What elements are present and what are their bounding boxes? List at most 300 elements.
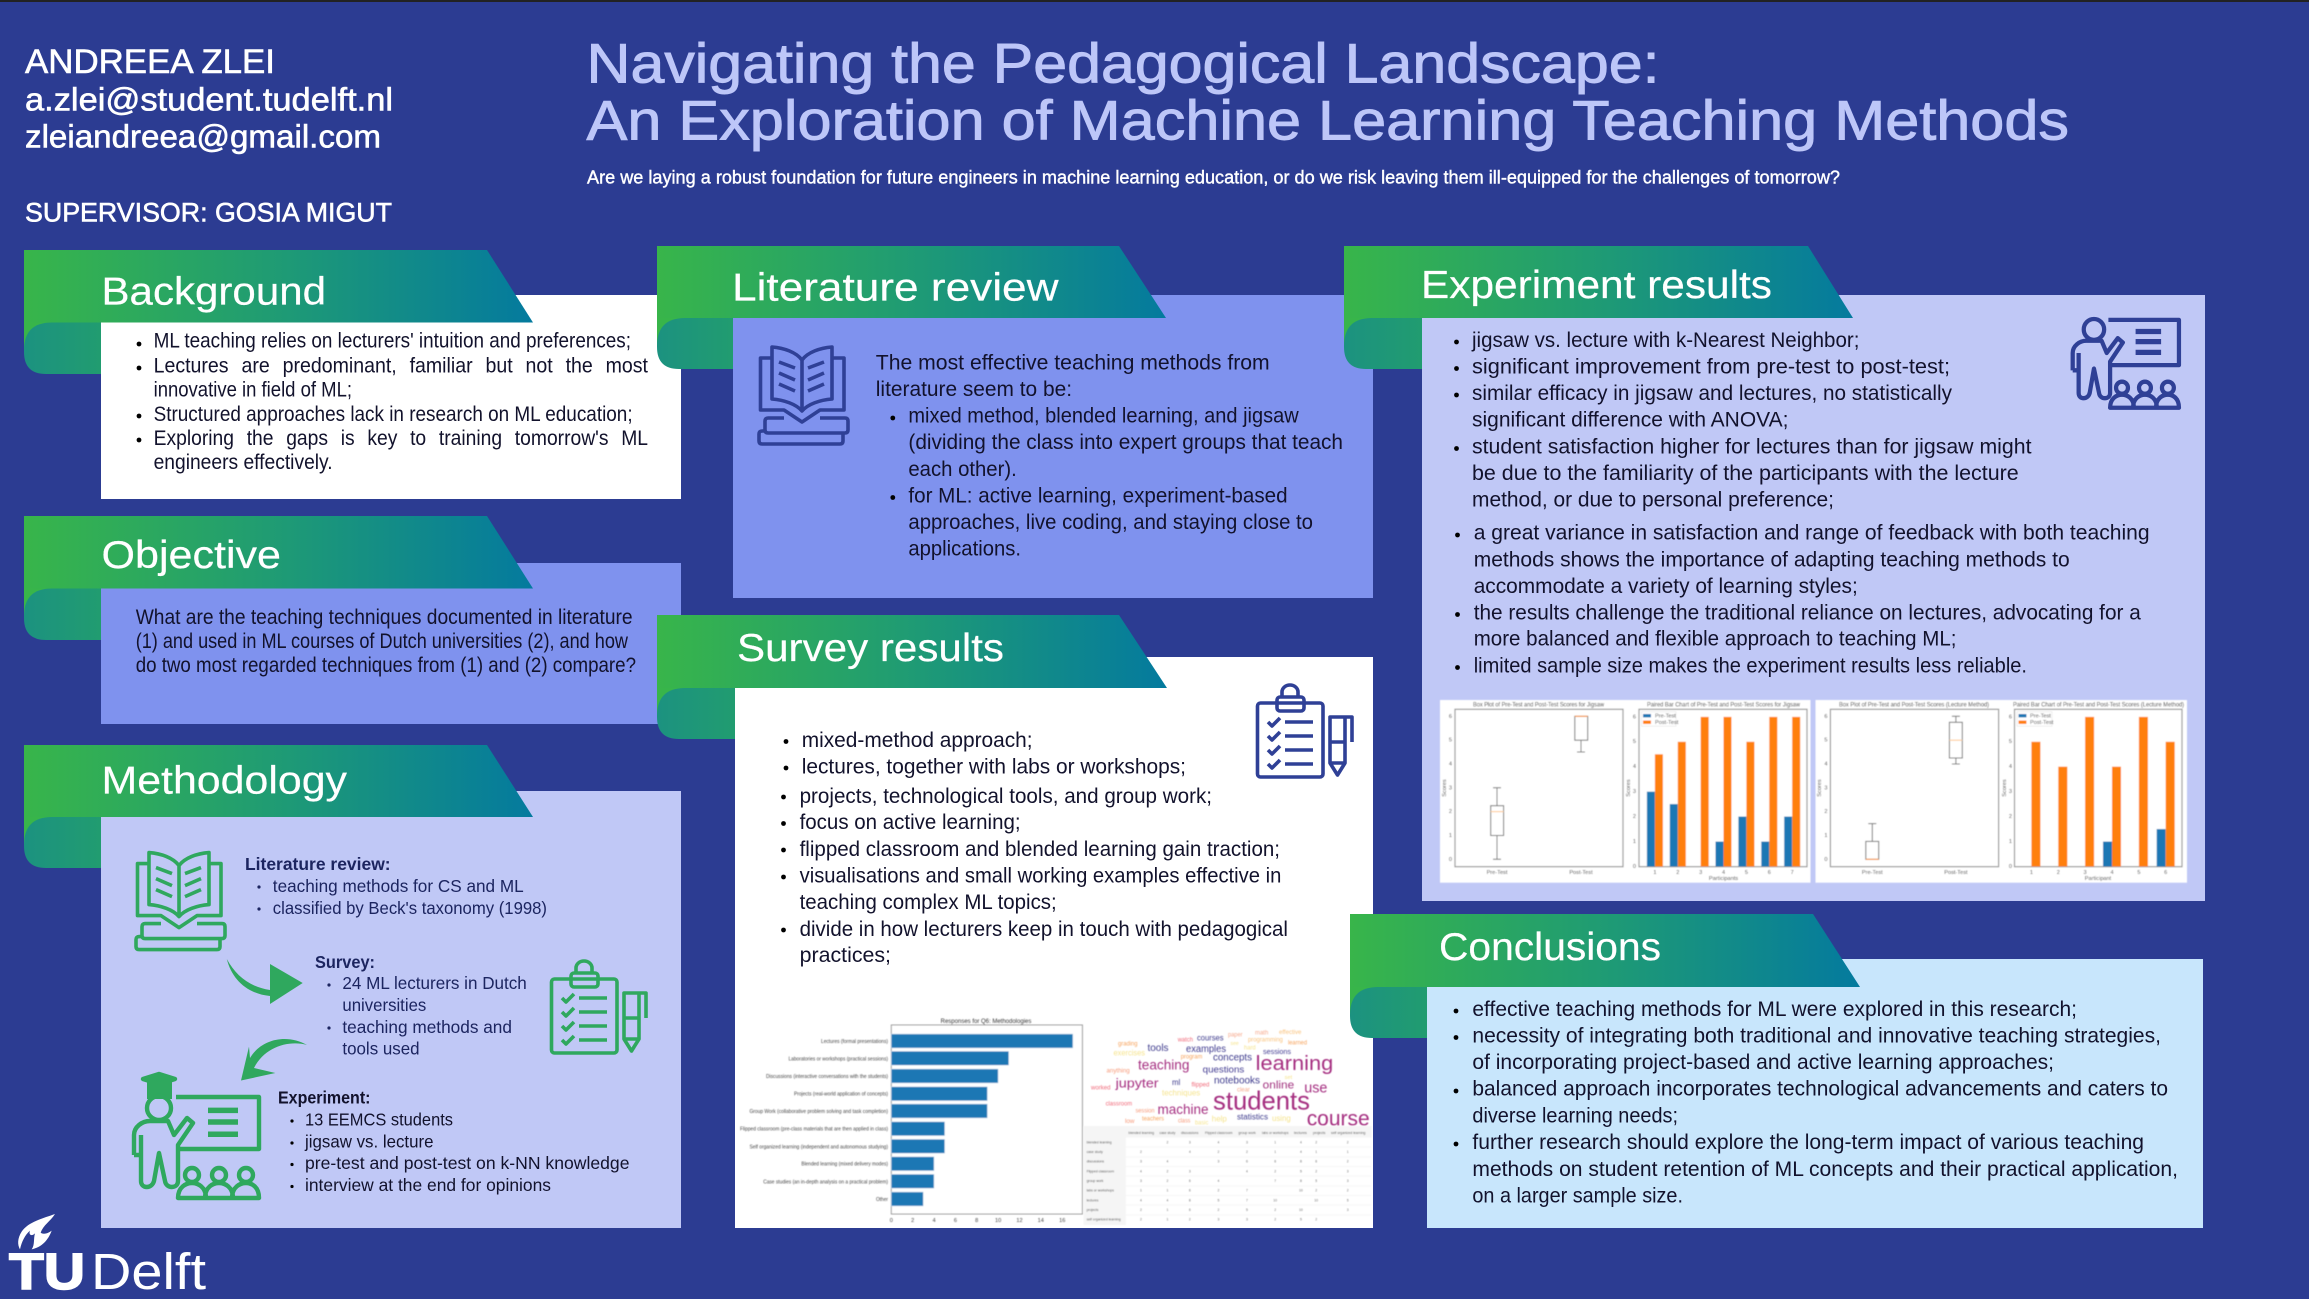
text: literature findings: The most effective teaching methods from: [876, 351, 1270, 374]
table: co-occurrence matrix: 6: [1274, 1160, 1276, 1164]
charts: jigsaw box plot and paired bars: 6: [1768, 870, 1771, 876]
heading: conclusions: Conclusions: [1439, 926, 1661, 969]
table: co-occurrence matrix: 10: [1314, 1198, 1318, 1202]
word cloud: statistics: [1237, 1112, 1268, 1121]
table: co-occurrence matrix: self organized learning: [1087, 1218, 1121, 1222]
bullet list: conclusions: on a larger sample size.: [1472, 1185, 1683, 1208]
table: co-occurrence matrix: 3: [1140, 1160, 1142, 1164]
table: co-occurrence matrix: projects: [1087, 1208, 1099, 1212]
word cloud: exercises: [1114, 1048, 1145, 1057]
charts: lecture box plot and paired bars: 1: [2009, 839, 2012, 845]
heading: objective: Objective: [102, 534, 281, 577]
table: co-occurrence matrix: 2: [1315, 1189, 1317, 1193]
charts: jigsaw box plot and paired bars: 6: [1449, 714, 1452, 720]
charts: lecture box plot and paired bars: 5: [1824, 738, 1828, 744]
literature review step: [245, 854, 547, 918]
charts: jigsaw box plot and paired bars: 1: [1653, 870, 1656, 876]
table: co-occurrence matrix: 6: [1189, 1208, 1191, 1212]
charts: jigsaw box plot and paired bars: Scores: [1626, 779, 1632, 797]
table: co-occurrence matrix: 4: [1217, 1179, 1219, 1183]
literature review step: Literature review:: [245, 854, 391, 874]
bullet list: experiment results: jigsaw vs. lecture with k-Nearest Neighbor;: [1471, 329, 1859, 352]
table: co-occurrence matrix: 2: [1217, 1150, 1219, 1154]
bar chart: responses for Q6 methodologies: [740, 1019, 1082, 1224]
word cloud: teachers: [1142, 1117, 1164, 1123]
bullet list: background: [137, 330, 648, 474]
charts: jigsaw box plot and paired bars: 5: [1745, 870, 1748, 876]
charts: jigsaw box plot and paired bars: Post-Test: [1655, 720, 1679, 726]
bullet list: experiment results: similar efficacy in jigsaw and lectures, no statistically: [1472, 382, 1952, 405]
table: co-occurrence matrix: 3: [1246, 1218, 1248, 1222]
table: co-occurrence matrix: 1: [1315, 1150, 1317, 1154]
table: co-occurrence matrix: 1: [1140, 1189, 1142, 1193]
charts: jigsaw box plot and paired bars: 2: [1449, 809, 1452, 815]
bullet list: survey results: flipped classroom and blended learning gain traction;: [800, 838, 1280, 861]
table: co-occurrence matrix: 2: [1315, 1218, 1317, 1222]
table: co-occurrence matrix: 2: [1140, 1150, 1142, 1154]
bar chart: responses for Q6 methodologies: 12: [1016, 1218, 1023, 1224]
table: co-occurrence matrix: group work: [1238, 1131, 1256, 1135]
table: co-occurrence matrix: 2: [1315, 1169, 1317, 1173]
table: co-occurrence matrix: 10: [1273, 1198, 1277, 1202]
word cloud: courses: [1197, 1034, 1224, 1043]
table: co-occurrence matrix: 2: [1140, 1218, 1142, 1222]
word cloud: ml: [1172, 1078, 1181, 1087]
bullet list: experiment results: significant difference with ANOVA;: [1472, 409, 1788, 432]
panel: objective: [24, 516, 681, 724]
table: co-occurrence matrix: 6: [1246, 1160, 1248, 1164]
table: co-occurrence matrix: 7: [1274, 1179, 1276, 1183]
word cloud: questions: [1203, 1065, 1244, 1076]
table: co-occurrence matrix: 8: [1189, 1198, 1191, 1202]
table: co-occurrence matrix: 2: [1274, 1208, 1276, 1212]
text: literature findings: applications.: [908, 537, 1021, 560]
table: co-occurrence matrix: 8: [1300, 1179, 1302, 1183]
bar chart: responses for Q6 methodologies: Self organized learning (independent and autonomous studying): [750, 1144, 888, 1150]
table: co-occurrence matrix: 7: [1246, 1189, 1248, 1193]
experiment step: [278, 1088, 630, 1195]
icon: teacher with graduation cap: [134, 1074, 259, 1198]
word cloud: examples: [1186, 1044, 1226, 1055]
heading: experiment results: Experiment results: [1421, 264, 1772, 307]
word cloud: sessions: [1263, 1047, 1291, 1056]
charts: lecture box plot and paired bars: 0: [2009, 864, 2012, 870]
charts: lecture box plot and paired bars: 6: [2164, 870, 2167, 876]
word cloud: watch: [1177, 1038, 1193, 1044]
word cloud: program: [1181, 1054, 1202, 1061]
charts: lecture box plot and paired bars: [1816, 700, 2187, 883]
charts: lecture box plot and paired bars: 6: [1824, 714, 1828, 720]
charts: jigsaw box plot and paired bars: 4: [1633, 764, 1636, 770]
word cloud: effective: [1279, 1030, 1302, 1036]
author block: ANDREEA ZLEI: [25, 43, 275, 81]
heading: background: Background: [102, 270, 326, 314]
charts: jigsaw box plot and paired bars: 6: [1633, 714, 1636, 720]
word cloud: learning: [1256, 1052, 1333, 1075]
bar chart: responses for Q6 methodologies: Group Work (collaborative problem solving and task completion): [750, 1109, 888, 1115]
charts: jigsaw box plot and paired bars: 7: [1791, 870, 1794, 876]
icon: clipboard: [1258, 685, 1352, 777]
table: co-occurrence matrix: 2: [1217, 1189, 1219, 1193]
panel: literature review: [657, 246, 1373, 598]
table: co-occurrence matrix: 3: [1140, 1179, 1142, 1183]
table: co-occurrence matrix: 5: [1300, 1218, 1302, 1222]
charts: jigsaw box plot and paired bars: Pre-Test: [1655, 714, 1676, 720]
table: co-occurrence matrix: 8: [1300, 1160, 1302, 1164]
experiment step: jigsaw vs. lecture: [304, 1132, 434, 1152]
table: co-occurrence matrix: case study: [1159, 1131, 1176, 1135]
bar chart: responses for Q6 methodologies: Case studies (an in-depth analysis on a practical problem): [763, 1179, 888, 1185]
bullet list: experiment results: a great variance in satisfaction and range of feedback with both teaching: [1474, 522, 2150, 545]
charts: lecture box plot and paired bars: 1: [1824, 833, 1828, 839]
table: co-occurrence matrix: 2: [1166, 1179, 1168, 1183]
charts: lecture box plot and paired bars: 2: [1824, 809, 1828, 815]
table: co-occurrence matrix: 5: [1300, 1169, 1302, 1173]
charts: lecture box plot and paired bars: 3: [1824, 786, 1828, 792]
charts: jigsaw box plot and paired bars: Box Plot of Pre-Test and Post-Test Scores for Jigsaw: [1473, 703, 1605, 709]
arrow: survey to experiment: [241, 1039, 307, 1080]
bar chart: responses for Q6 methodologies: 8: [975, 1218, 978, 1224]
bullet list: conclusions: of incorporating project-based and active learning approaches;: [1472, 1051, 2054, 1074]
bullet list: experiment results: limited sample size makes the experiment results less reliable.: [1474, 654, 2027, 677]
icon: book: [759, 347, 848, 444]
charts: jigsaw box plot and paired bars: Paired Bar Chart of Pre-Test and Post-Test Scores for Jigsaw: [1647, 703, 1801, 709]
bullet list: experiment results: the results challenge the traditional reliance on lectures, advocating for a: [1474, 601, 2141, 624]
bar chart: responses for Q6 methodologies: Projects (real-world application of concepts): [794, 1092, 888, 1098]
charts: jigsaw box plot and paired bars: 2: [1676, 870, 1679, 876]
word cloud: flipped: [1192, 1082, 1210, 1089]
word cloud: online: [1263, 1080, 1294, 1092]
word cloud: paper: [1228, 1032, 1242, 1038]
bullet list: background: Exploring the gaps is key to training tomorrow's ML: [154, 427, 648, 450]
survey step: 24 ML lecturers in Dutch: [342, 973, 527, 993]
table: co-occurrence matrix: 6: [1189, 1189, 1191, 1193]
table: co-occurrence matrix: case study: [1087, 1150, 1103, 1154]
table: co-occurrence matrix: 1: [1274, 1150, 1276, 1154]
arrow: literature to survey: [227, 959, 303, 1004]
charts: lecture box plot and paired bars: 4: [1824, 762, 1828, 768]
panel: experiment results: [1344, 246, 2205, 901]
bullet list: conclusions: methods on student retention of ML concepts and their practical application,: [1472, 1158, 2178, 1181]
text: literature findings: [876, 351, 1343, 560]
word cloud: use: [1304, 1081, 1327, 1097]
table: co-occurrence matrix: 2: [1217, 1208, 1219, 1212]
logo: TU Delft: TU: [9, 1243, 85, 1299]
word cloud: notebooks: [1214, 1075, 1260, 1086]
bullet list: experiment results: more balanced and flexible approach to teaching ML;: [1474, 628, 1956, 651]
charts: jigsaw box plot and paired bars: 3: [1449, 786, 1452, 792]
survey step: [315, 952, 527, 1058]
bullet list: experiment results: be due to the familiarity of the participants with the lecture: [1472, 462, 2019, 485]
table: co-occurrence matrix: 4: [1300, 1150, 1302, 1154]
word cloud: machine: [1158, 1101, 1209, 1117]
table: co-occurrence matrix: 3: [1189, 1140, 1191, 1144]
table: co-occurrence matrix: 3: [1347, 1208, 1349, 1212]
word cloud: course: [1307, 1108, 1370, 1130]
bar chart: responses for Q6 methodologies: Other: [876, 1197, 888, 1203]
word cloud: anything: [1106, 1068, 1130, 1075]
bullet list: background: innovative in field of ML;: [154, 379, 352, 402]
survey step: Survey:: [315, 952, 375, 972]
panel: survey results: [657, 615, 1373, 1228]
table: co-occurrence matrix: 1: [1166, 1218, 1168, 1222]
table: co-occurrence matrix: 2: [1274, 1169, 1276, 1173]
word cloud: students: [1213, 1088, 1310, 1116]
charts: jigsaw box plot and paired bars: Scores: [1442, 779, 1448, 797]
word cloud: using: [1272, 1114, 1291, 1123]
table: co-occurrence matrix: 2: [1189, 1218, 1191, 1222]
charts: lecture box plot and paired bars: 4: [2009, 764, 2012, 770]
bullet list: survey results: divide in how lecturers keep in touch with pedagogical: [800, 918, 1288, 941]
author block: [25, 43, 393, 228]
panel: conclusions: [1350, 914, 2203, 1228]
title: Navigating the Pedagogical Landscape:: [586, 32, 1660, 95]
table: co-occurrence matrix: 4: [1140, 1198, 1142, 1202]
bullet list: conclusions: diverse learning needs;: [1472, 1105, 1678, 1128]
table: co-occurrence matrix: 10: [1299, 1208, 1303, 1212]
charts: lecture box plot and paired bars: 3: [2084, 870, 2087, 876]
bullet list: background: Structured approaches lack in research on ML education;: [154, 403, 633, 426]
table: co-occurrence matrix: 6: [1315, 1160, 1317, 1164]
bar chart: responses for Q6 methodologies: Laboratories or workshops (practical sessions): [788, 1056, 888, 1062]
charts: jigsaw box plot and paired bars: Participants: [1709, 876, 1738, 882]
charts: lecture box plot and paired bars: 5: [2137, 870, 2140, 876]
charts: jigsaw box plot and paired bars: Pre-Test: [1487, 870, 1508, 876]
bullet list: survey results: mixed-method approach;: [802, 729, 1033, 752]
charts: lecture box plot and paired bars: 0: [1824, 857, 1828, 863]
table: co-occurrence matrix: 2: [1166, 1169, 1168, 1173]
bullet list: survey results: practices;: [800, 944, 891, 967]
charts: lecture box plot and paired bars: 4: [2110, 870, 2114, 876]
word cloud: help: [1212, 1115, 1227, 1124]
word cloud: [1090, 1029, 1370, 1130]
charts: lecture box plot and paired bars: Participant: [2085, 876, 2112, 882]
table: co-occurrence matrix: 3: [1347, 1179, 1349, 1183]
bullet list: conclusions: balanced approach incorporates technological advancements and caters to: [1472, 1078, 2168, 1100]
text: literature findings: literature seem to be:: [876, 378, 1072, 401]
table: co-occurrence matrix: 4: [1166, 1198, 1168, 1202]
text: literature findings: mixed method, blended learning, and jigsaw: [908, 405, 1299, 428]
text: literature findings: for ML: active learning, experiment-based: [908, 484, 1288, 507]
survey step: tools used: [342, 1038, 420, 1058]
icon: teacher: [2073, 319, 2179, 408]
word cloud: basic: [1195, 1120, 1208, 1126]
word cloud: worked: [1090, 1085, 1111, 1092]
literature review step: teaching methods for CS and ML: [273, 876, 524, 896]
icon: book: [136, 853, 225, 950]
table: co-occurrence matrix: 2: [1166, 1140, 1168, 1144]
logo: TU Delft: [9, 1214, 206, 1299]
table: co-occurrence matrix: 3: [1246, 1140, 1248, 1144]
word cloud: set: [1285, 1075, 1293, 1081]
table: co-occurrence matrix: labs or workshops: [1087, 1189, 1114, 1193]
author block: SUPERVISOR: GOSIA MIGUT: [25, 198, 392, 228]
bullet list: survey results: visualisations and small working examples effective in: [800, 865, 1281, 888]
word cloud: teaching: [1138, 1057, 1189, 1072]
charts: lecture box plot and paired bars: 3: [2009, 789, 2012, 795]
table: co-occurrence matrix: self organized learning: [1331, 1131, 1366, 1135]
heading: literature review: Literature review: [732, 267, 1059, 310]
charts: lecture box plot and paired bars: 2: [2009, 814, 2012, 820]
word cloud: see: [1230, 1041, 1239, 1047]
table: co-occurrence matrix: 5: [1347, 1198, 1349, 1202]
charts: jigsaw box plot and paired bars: 1: [1633, 839, 1636, 845]
table: co-occurrence matrix: 4: [1300, 1140, 1302, 1144]
charts: jigsaw box plot and paired bars: 5: [1449, 738, 1452, 744]
charts: jigsaw box plot and paired bars: 5: [1633, 739, 1636, 745]
word cloud: concepts: [1213, 1053, 1252, 1064]
bar chart: responses for Q6 methodologies: Discussions (interactive conversations with the students): [766, 1074, 888, 1080]
bar chart: responses for Q6 methodologies: Lectures (formal presentations): [821, 1039, 888, 1045]
charts: lecture box plot and paired bars: Pre-Test: [2030, 714, 2051, 720]
charts: jigsaw box plot and paired bars: 4: [1449, 762, 1452, 768]
word cloud: low: [1125, 1119, 1135, 1125]
word cloud: tools: [1148, 1043, 1168, 1054]
bullet list: experiment results: [1454, 329, 2150, 677]
bar chart: responses for Q6 methodologies: 14: [1038, 1218, 1044, 1224]
table: co-occurrence matrix: [1084, 1126, 1372, 1225]
heading: survey results: Survey results: [737, 627, 1004, 670]
word cloud: session: [1136, 1107, 1155, 1114]
bar chart: responses for Q6 methodologies: 6: [954, 1218, 957, 1224]
title: An Exploration of Machine Learning Teaching Methods: [586, 88, 2069, 151]
panel: methodology: [24, 745, 681, 1228]
heading: methodology: Methodology: [102, 760, 348, 802]
experiment step: 13 EEMCS students: [305, 1110, 453, 1130]
table: co-occurrence matrix: 7: [1246, 1198, 1248, 1202]
charts: jigsaw box plot and paired bars: 0: [1633, 864, 1636, 870]
charts: lecture box plot and paired bars: Post-Test: [1944, 870, 1968, 876]
text: literature findings: (dividing the class into expert groups that teach: [908, 431, 1343, 454]
table: co-occurrence matrix: 1: [1347, 1150, 1349, 1154]
word cloud: learned: [1288, 1040, 1307, 1047]
bullet list: background: Lectures are predominant, familiar but not the most: [154, 355, 648, 378]
bullet list: experiment results: methods shows the importance of adapting teaching methods to: [1474, 548, 2070, 571]
text: literature findings: approaches, live coding, and staying close to: [908, 511, 1313, 534]
table: co-occurrence matrix: 2: [1274, 1218, 1276, 1222]
charts: jigsaw box plot and paired bars: 2: [1633, 814, 1636, 820]
table: co-occurrence matrix: 10: [1299, 1189, 1303, 1193]
bar chart: responses for Q6 methodologies: Responses for Q6: Methodologies: [941, 1019, 1031, 1025]
bullet list: experiment results: method, or due to personal preference;: [1472, 489, 1834, 512]
author block: a.zlei@student.tudelft.nl: [25, 82, 393, 118]
charts: lecture box plot and paired bars: Scores: [1817, 779, 1823, 797]
table: co-occurrence matrix: lectures: [1294, 1131, 1307, 1135]
charts: lecture box plot and paired bars: Box Plot of Pre-Test and Post-Test Scores (Lecture Method): [1839, 703, 1989, 709]
charts: lecture box plot and paired bars: 5: [2009, 739, 2012, 745]
table: co-occurrence matrix: 2: [1347, 1140, 1349, 1144]
word cloud: programming: [1248, 1037, 1283, 1044]
bullet list: conclusions: necessity of integrating both traditional and innovative teaching strategies,: [1472, 1025, 2161, 1048]
charts: jigsaw box plot and paired bars: [1440, 700, 1810, 883]
charts: jigsaw box plot and paired bars: 3: [1633, 789, 1636, 795]
word cloud: jupyter: [1114, 1075, 1159, 1090]
survey step: teaching methods and: [342, 1017, 512, 1037]
bullet list: experiment results: significant improvement from pre-test to post-test;: [1472, 355, 1950, 378]
table: co-occurrence matrix: 5: [1315, 1179, 1317, 1183]
table: co-occurrence matrix: 4: [1189, 1150, 1191, 1154]
objective question text: (1) and used in ML courses of Dutch universities (2), and how: [136, 630, 629, 653]
bullet list: conclusions: effective teaching methods for ML were explored in this research;: [1472, 998, 2077, 1021]
bullet list: survey results: focus on active learning;: [800, 811, 1021, 834]
experiment step: pre-test and post-test on k-NN knowledge: [305, 1153, 630, 1173]
table: co-occurrence matrix: 6: [1189, 1179, 1191, 1183]
charts: lecture box plot and paired bars: 1: [2030, 870, 2033, 876]
title: [586, 32, 2069, 151]
table: co-occurrence matrix: discussions: [1181, 1131, 1199, 1135]
table: co-occurrence matrix: lectures: [1087, 1198, 1099, 1202]
bar chart: responses for Q6 methodologies: Blended learning (mixed delivery modes): [801, 1162, 888, 1168]
table: co-occurrence matrix: blended learning: [1087, 1140, 1112, 1144]
bullet list: experiment results: student satisfaction higher for lectures than for jigsaw might: [1472, 435, 2032, 458]
charts: lecture box plot and paired bars: Post-Test: [2030, 720, 2054, 726]
table: co-occurrence matrix: 4: [1246, 1169, 1248, 1173]
objective question text: do two most regarded techniques from (1) and (2) compare?: [136, 654, 636, 677]
charts: jigsaw box plot and paired bars: 3: [1699, 870, 1702, 876]
panel: background: [24, 250, 681, 499]
table: co-occurrence matrix: 5: [1217, 1198, 1219, 1202]
table: co-occurrence matrix: 2: [1246, 1150, 1248, 1154]
table: co-occurrence matrix: 2: [1140, 1208, 1142, 1212]
bar chart: responses for Q6 methodologies: 0: [890, 1218, 893, 1224]
table: co-occurrence matrix: 4: [1217, 1140, 1219, 1144]
bar chart: responses for Q6 methodologies: 16: [1059, 1218, 1065, 1224]
word cloud: clear: [1237, 1087, 1250, 1093]
experiment step: interview at the end for opinions: [305, 1175, 551, 1195]
table: co-occurrence matrix: 4: [1166, 1160, 1168, 1164]
bullet list: background: ML teaching relies on lecturers' intuition and preferences;: [154, 330, 631, 353]
table: co-occurrence matrix: 3: [1217, 1160, 1219, 1164]
word cloud: techniques: [1162, 1089, 1200, 1098]
bar chart: responses for Q6 methodologies: 2: [911, 1218, 914, 1224]
bar chart: responses for Q6 methodologies: Flipped classroom (pre-class materials that are then applied in class): [740, 1127, 888, 1133]
table: co-occurrence matrix: labs or workshops: [1262, 1131, 1289, 1135]
table: co-occurrence matrix: Flipped classroom: [1087, 1169, 1114, 1173]
objective question text: What are the teaching techniques documented in literature: [136, 606, 633, 629]
table: co-occurrence matrix: group work: [1087, 1179, 1104, 1183]
table: co-occurrence matrix: 2: [1347, 1160, 1349, 1164]
author block: zleiandreea@gmail.com: [25, 118, 381, 154]
bar chart: responses for Q6 methodologies: 4: [932, 1218, 936, 1224]
table: co-occurrence matrix: Flipped classroom: [1205, 1131, 1233, 1135]
table: co-occurrence matrix: 2: [1347, 1189, 1349, 1193]
bullet list: experiment results: accommodate a variety of learning styles;: [1474, 575, 1858, 598]
charts: lecture box plot and paired bars: 6: [2009, 714, 2012, 720]
table: co-occurrence matrix: 2: [1315, 1140, 1317, 1144]
word cloud: classroom: [1106, 1101, 1132, 1108]
table: co-occurrence matrix: 1: [1166, 1208, 1168, 1212]
table: co-occurrence matrix: blended learning: [1128, 1131, 1154, 1135]
table: co-occurrence matrix: 1: [1274, 1140, 1276, 1144]
word cloud: class: [1178, 1118, 1190, 1124]
charts: lecture box plot and paired bars: Paired Bar Chart of Pre-Test and Post-Test Scores (Lecture Method): [2013, 703, 2184, 709]
bullet list: conclusions: [1454, 998, 2178, 1208]
charts: jigsaw box plot and paired bars: 4: [1722, 870, 1725, 876]
logo: TU Delft: Delft: [91, 1243, 206, 1299]
text: literature findings: each other).: [908, 458, 1017, 481]
word cloud: math: [1255, 1029, 1269, 1036]
table: co-occurrence matrix: discussions: [1087, 1160, 1104, 1164]
subtitle: Are we laying a robust foundation for future engineers in machine learning education, or do we risk leaving them ill-equipped for the challenges of tomorrow?: [587, 166, 1840, 187]
table: co-occurrence matrix: 3: [1189, 1169, 1191, 1173]
charts: jigsaw box plot and paired bars: 1: [1449, 833, 1452, 839]
bar chart: responses for Q6 methodologies: 10: [995, 1218, 1001, 1224]
charts: lecture box plot and paired bars: 2: [2057, 870, 2060, 876]
objective question text: [136, 606, 636, 677]
table: co-occurrence matrix: 4: [1140, 1169, 1142, 1173]
bullet list: survey results: lectures, together with labs or workshops;: [802, 756, 1186, 779]
charts: lecture box plot and paired bars: Scores: [2002, 779, 2008, 797]
